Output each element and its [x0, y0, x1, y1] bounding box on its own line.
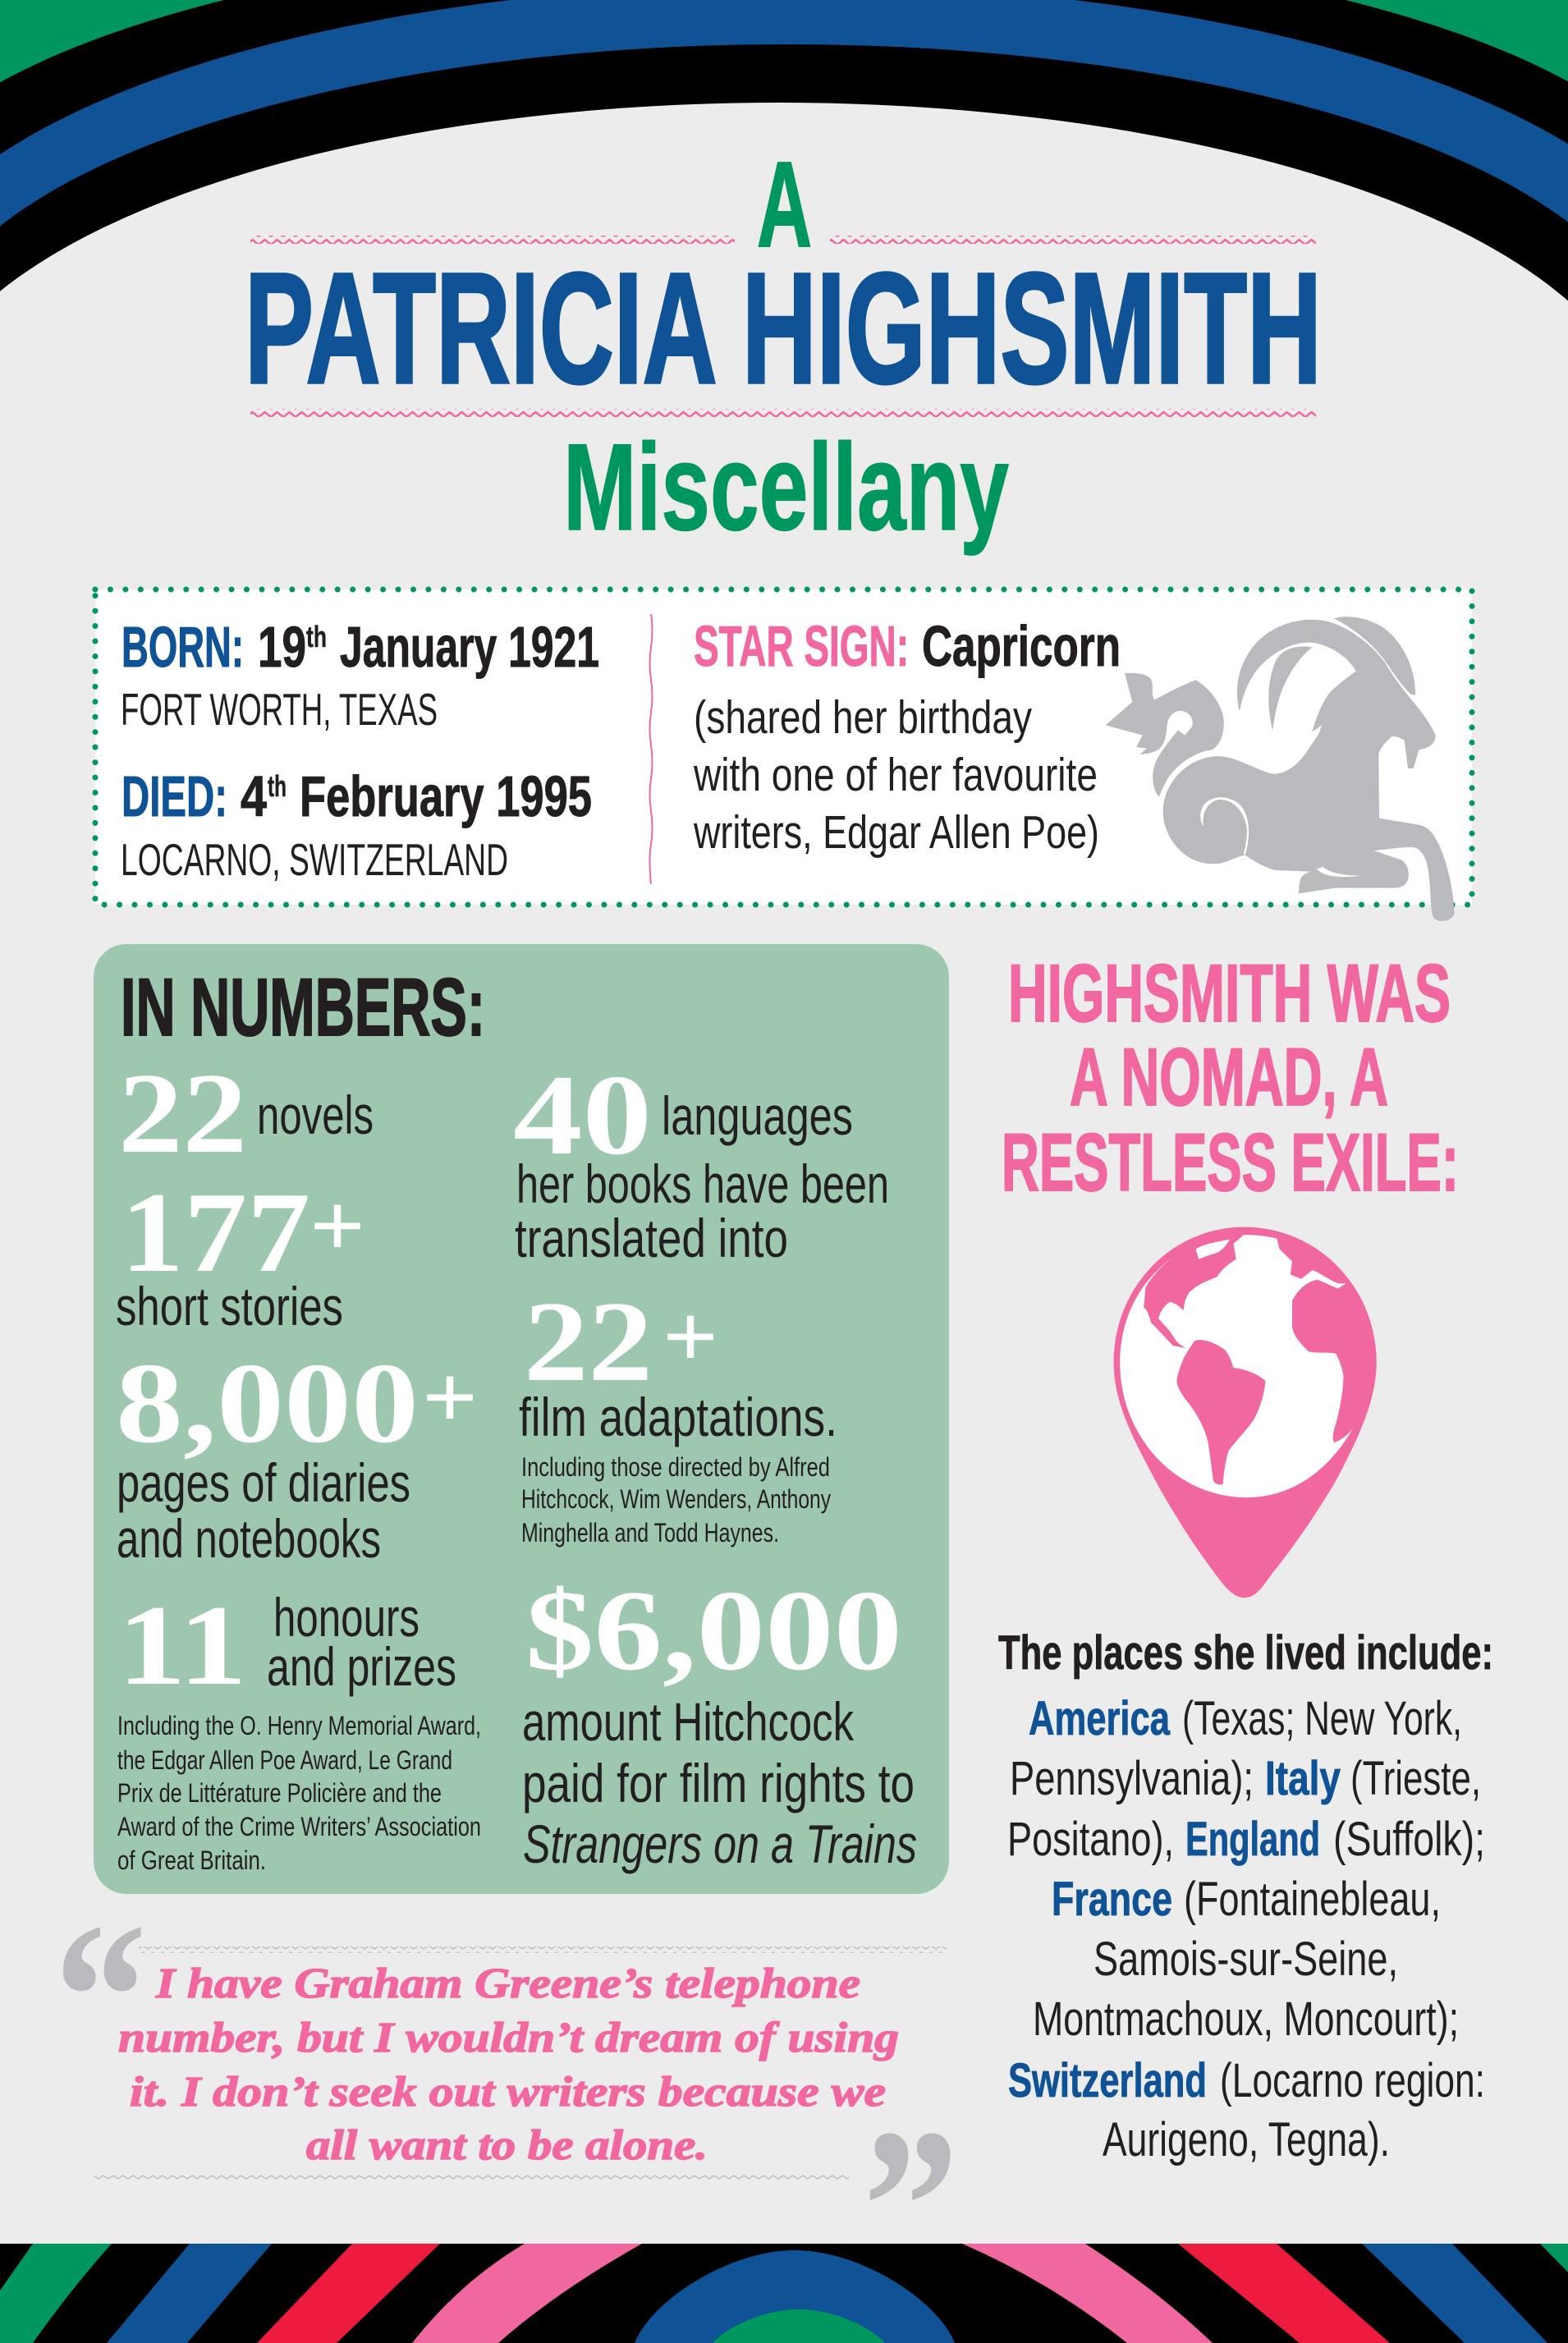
stat: honours and prizes: honours — [273, 1587, 420, 1648]
text: the places she lived: Italy — [1265, 1752, 1341, 1805]
text: the places she lived: Switzerland — [1008, 2054, 1207, 2107]
text: the places she lived: France — [1052, 1873, 1172, 1926]
quote text: all want to be alone. — [306, 2122, 708, 2169]
text: the places she lived — [998, 1626, 1493, 2166]
stat: short stories: short stories — [116, 1276, 343, 1337]
stat: film rights fee — [522, 1567, 917, 1874]
bottom striped arcs banner — [0, 2244, 1568, 2343]
text: the places she lived: (Suffolk); — [1333, 1813, 1485, 1866]
stat: languages: her books have been — [516, 1153, 889, 1214]
text: the places she lived: (Trieste, — [1350, 1752, 1481, 1805]
quote text: number, but I wouldn’t dream of using — [118, 2015, 899, 2061]
died details: 4 — [241, 764, 267, 828]
star sign details: (shared her birthday — [694, 691, 1032, 744]
stat: pages of diaries: + — [422, 1347, 478, 1447]
quote block: ” — [863, 2084, 959, 2329]
born details: FORT WORTH, TEXAS — [121, 684, 438, 735]
born details — [121, 615, 599, 735]
died details — [121, 764, 592, 885]
stat: honours and prizes: of Great Britain. — [117, 1846, 266, 1875]
heading: highsmith was a nomad: A NOMAD, A — [1070, 1031, 1388, 1122]
born details: th — [306, 620, 327, 653]
died details: February 1995 — [300, 764, 592, 828]
stat: honours and prizes: 11 — [117, 1582, 247, 1709]
stat: short stories: 177 — [121, 1169, 310, 1296]
star sign details: Capricorn — [922, 614, 1121, 678]
stat: short stories: + — [309, 1176, 365, 1276]
quote text — [118, 1960, 899, 2169]
stat: honours and prizes: Prix de Littérature Policière and the — [117, 1778, 442, 1808]
quote block — [54, 1879, 959, 2329]
icon: globe map pin — [1114, 1227, 1377, 1598]
star sign details: writers, Edgar Allen Poe) — [693, 806, 1099, 859]
quote block: “ — [54, 1879, 147, 2114]
stat: film adaptations: Hitchcock, Wim Wenders, Anthony — [521, 1484, 831, 1514]
born details: 19 — [258, 615, 306, 679]
died details: th — [268, 769, 287, 803]
stat: film rights fee: $6,000 — [525, 1567, 902, 1694]
title: Miscellany — [563, 418, 1009, 556]
title: A — [757, 137, 812, 273]
stat: film rights fee: Strangers on a Trains — [523, 1813, 917, 1874]
died details: DIED: — [121, 764, 227, 828]
panel: in numbers — [94, 944, 949, 1894]
stat: honours and prizes: Award of the Crime Writers’ Association — [117, 1812, 481, 1841]
stat: pages of diaries: and notebooks — [117, 1508, 381, 1569]
heading: highsmith was a nomad — [1002, 947, 1459, 1208]
text: the places she lived: (Texas; New York, — [1182, 1692, 1462, 1745]
stat: film rights fee: amount Hitchcock — [522, 1691, 855, 1752]
quote text: it. I don’t seek out writers because we — [130, 2069, 886, 2116]
stat: honours and prizes: the Edgar Allen Poe Award, Le Grand — [117, 1745, 452, 1775]
stat: honours and prizes — [117, 1582, 481, 1875]
stat: film rights fee: paid for film rights to — [522, 1753, 915, 1813]
star sign details: STAR SIGN: — [694, 614, 909, 678]
text: the places she lived: (Fontainebleau, — [1184, 1873, 1441, 1926]
text: the places she lived: Positano), — [1007, 1813, 1174, 1866]
title — [245, 137, 1322, 556]
stat: film adaptations: + — [663, 1286, 718, 1387]
panel: birth, death and star sign — [95, 589, 1472, 905]
stat: pages of diaries: pages of diaries — [117, 1452, 410, 1513]
stat: languages: translated into — [515, 1208, 788, 1268]
text: the places she lived: (Locarno region: — [1220, 2054, 1485, 2107]
icon: capricorn — [1106, 617, 1455, 921]
stat: languages: languages — [662, 1085, 853, 1146]
stat: honours and prizes: Including the O. Henry Memorial Award, — [117, 1711, 481, 1740]
text: the places she lived: Pennsylvania); — [1010, 1752, 1254, 1805]
stat: honours and prizes: and prizes — [267, 1636, 456, 1697]
stat: novels — [118, 1050, 374, 1177]
born details: BORN: — [121, 615, 244, 679]
born details: January 1921 — [340, 615, 599, 679]
stat: film adaptations: Including those directed by Alfred — [521, 1452, 830, 1482]
quote text: I have Graham Greene’s telephone — [155, 1960, 860, 2007]
stat: film adaptations: 22 — [524, 1278, 653, 1405]
stat: film adaptations: Minghella and Todd Haynes. — [521, 1518, 779, 1547]
stat: film adaptations: film adaptations. — [519, 1387, 837, 1447]
heading: in numbers: IN NUMBERS: — [121, 961, 485, 1052]
text: the places she lived: Samois-sur-Seine, — [1093, 1933, 1398, 1986]
stat: novels: novels — [257, 1084, 374, 1145]
stat: languages — [513, 1052, 889, 1268]
top concentric arcs banner — [0, 0, 1568, 764]
stat: pages of diaries — [116, 1340, 478, 1569]
text: the places she lived: England — [1185, 1813, 1320, 1866]
stat: languages: 40 — [513, 1052, 652, 1179]
text: the places she lived: Aurigeno, Tegna). — [1103, 2113, 1390, 2166]
text: the places she lived: America — [1029, 1692, 1171, 1745]
stat: film adaptations — [519, 1278, 837, 1547]
died details: LOCARNO, SWITZERLAND — [121, 834, 508, 885]
stat: pages of diaries: 8,000 — [116, 1340, 419, 1467]
stat: novels: 22 — [118, 1050, 247, 1177]
star sign details — [693, 614, 1121, 859]
stat: short stories — [116, 1169, 365, 1337]
star sign details: with one of her favourite — [693, 749, 1098, 801]
